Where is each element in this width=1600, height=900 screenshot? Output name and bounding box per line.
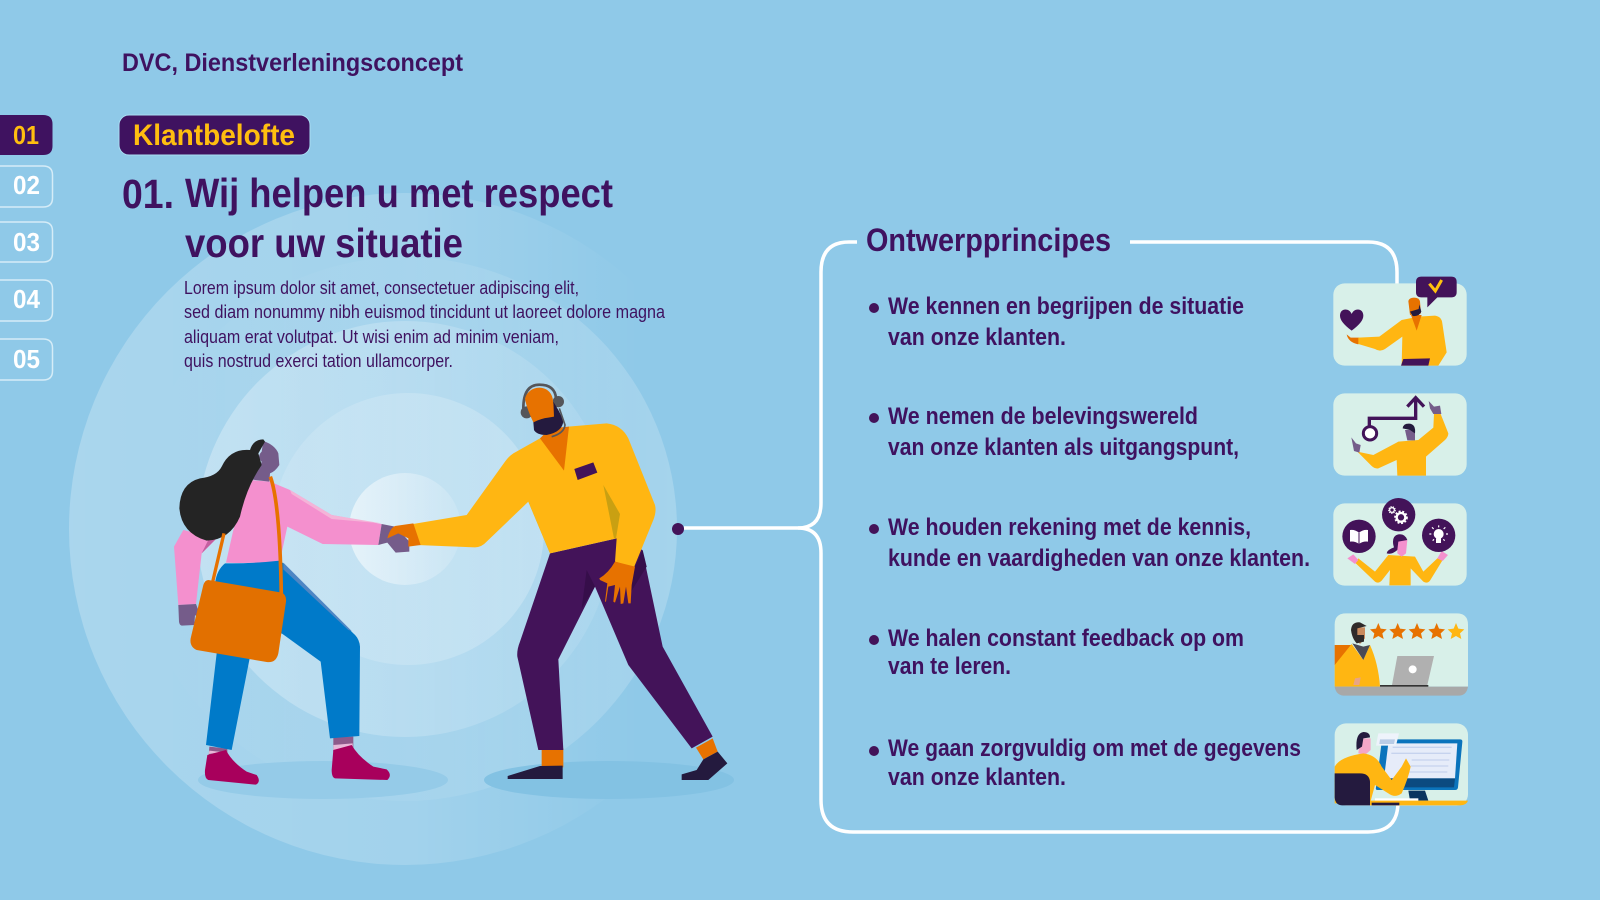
tab 04 — [0, 280, 52, 321]
tab 01 active: 01 — [13, 120, 39, 150]
illustration: woman with bag — [174, 439, 409, 785]
ground shadows — [198, 761, 734, 799]
tab 04: 04 — [13, 284, 41, 314]
intro text: Lorem ipsum dolor sit amet, consectetuer adipiscing elit, — [184, 277, 579, 298]
icon: light bulb — [1422, 519, 1455, 552]
principle 1 — [869, 293, 1244, 351]
intro text: sed diam nonummy nibh euismod tincidunt ut laoreet dolore magna — [184, 301, 666, 322]
connector dot — [672, 523, 684, 535]
icon: book — [1342, 520, 1376, 553]
intro text: aliquam erat volutpat. Ut wisi enim ad minim veniam, — [184, 326, 559, 347]
principle 1: van onze klanten. — [888, 324, 1066, 351]
principle 5: van onze klanten. — [888, 764, 1066, 791]
tab 05 — [0, 339, 52, 380]
headset and head — [521, 385, 565, 437]
intro text — [184, 277, 666, 371]
principle 5: We gaan zorgvuldig om met de gegevens — [888, 735, 1301, 762]
icon: gears — [1382, 498, 1415, 531]
intro text: quis nostrud exerci tation ullamcorper. — [184, 350, 453, 371]
main heading — [122, 170, 613, 266]
principle 3: We houden rekening met de kennis, — [888, 514, 1251, 541]
page title: DVC, Dienstverleningsconcept — [122, 49, 464, 77]
icon card 2: perspective — [1333, 393, 1467, 476]
illustration: man with headset — [413, 385, 727, 780]
principle 3 — [869, 514, 1310, 572]
principle 5 — [869, 735, 1301, 791]
main heading: voor uw situatie — [185, 220, 463, 266]
principle 2: van onze klanten als uitgangspunt, — [888, 434, 1239, 461]
list of principles — [869, 293, 1310, 791]
icon card 3: knowledge — [1333, 498, 1467, 586]
principle 2: We nemen de belevingswereld — [888, 403, 1198, 430]
principle 4: van te leren. — [888, 653, 1011, 680]
heading: Ontwerpprincipes: Ontwerpprincipes — [866, 222, 1111, 258]
icon card 4: feedback — [1335, 613, 1468, 696]
badge: Klantbelofte: Klantbelofte — [133, 119, 295, 152]
principle 3: kunde en vaardigheden van onze klanten. — [888, 545, 1310, 572]
tab 02 — [0, 166, 52, 207]
navigation tabs — [0, 115, 52, 380]
tab 03 — [0, 222, 52, 262]
tab 01 active — [0, 115, 52, 155]
star rating — [1370, 623, 1464, 639]
icon card 1: understanding — [1333, 277, 1467, 366]
principle 4 — [869, 625, 1244, 680]
tab 02: 02 — [13, 170, 40, 200]
tab 03: 03 — [13, 227, 40, 257]
hand of man over handshake — [387, 523, 421, 547]
principle 4: We halen constant feedback op om — [888, 625, 1244, 652]
main heading: 01. — [122, 171, 174, 217]
tab 05: 05 — [13, 344, 40, 374]
connector bracket — [672, 242, 1398, 832]
principle 2 — [869, 403, 1239, 461]
concentric background circles — [69, 193, 741, 865]
icon card 5: data — [1335, 723, 1468, 806]
main heading: Wij helpen u met respect — [185, 170, 613, 216]
principle 1: We kennen en begrijpen de situatie — [888, 293, 1244, 320]
